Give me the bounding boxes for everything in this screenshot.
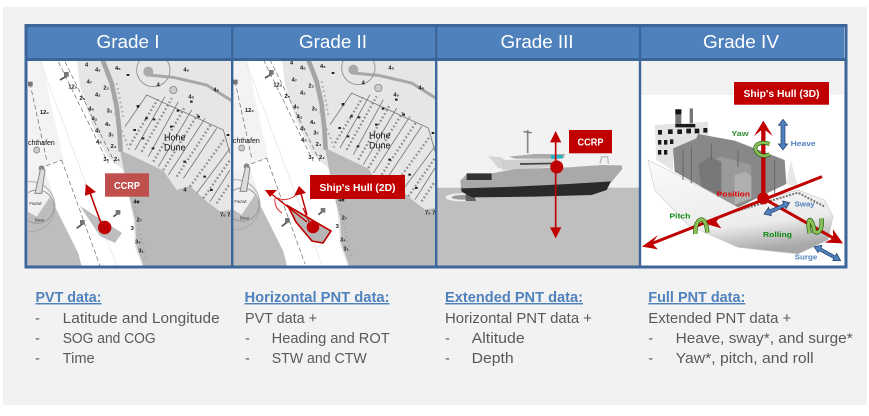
chart map: grade II: 4: [388, 186, 392, 192]
text block: Full PNT data: Yaw*, pitch, and roll: [676, 351, 814, 367]
chart map: grade I: 2₄: [111, 144, 117, 150]
chart map: grade I: 3₂: [107, 109, 113, 115]
chart map: grade II: 4₅: [393, 92, 399, 98]
chart map: grade I: chthafen: [28, 140, 55, 147]
icon: vessel side view: [446, 130, 622, 201]
chart map: grade II: 4₅: [388, 66, 394, 72]
blue translation arrows: [764, 119, 841, 261]
position dot: [307, 221, 319, 233]
green rotation arrows: [695, 143, 822, 234]
heading: Grade III: Grade III: [500, 32, 574, 52]
text block: Full PNT data: -: [648, 351, 653, 367]
motion labels: Rolling: [763, 230, 792, 239]
heading arrow: [85, 184, 101, 223]
chart map: grade II: [233, 61, 435, 266]
chart map: grade II: 2₅: [284, 94, 290, 100]
chart map: grade I: 4₅: [183, 68, 189, 74]
heading: Grade IV: [641, 27, 844, 58]
text block: PVT data: -: [35, 331, 40, 347]
chart map: grade II: 4: [290, 61, 294, 67]
chart map: grade I: 3₄: [135, 239, 141, 245]
text block: Extended PNT data: Extended PNT data:: [445, 290, 583, 306]
panel: grade II: [233, 27, 435, 266]
heading: Grade IV: Grade IV: [703, 32, 779, 52]
chart map: grade I: 4₁: [105, 122, 111, 128]
text block: Horizontal PNT data: Horizontal PNT data:: [244, 290, 390, 306]
chart map: grade I: 3: [131, 226, 134, 232]
position dot: [98, 221, 111, 234]
text block: Horizontal PNT data: STW and CTW: [272, 351, 367, 367]
chart map: grade II: 2₂: [308, 83, 314, 89]
motion labels: Yaw: [731, 129, 749, 138]
chart map: grade I: 4₂: [95, 93, 101, 99]
chart map: grade I: 12₀: [40, 110, 49, 116]
text block: Extended PNT data: Depth: [472, 351, 514, 367]
position dot: [757, 192, 769, 204]
heading: Grade I: [27, 27, 231, 58]
text block: Full PNT data: Full PNT data:: [648, 290, 745, 306]
heading: Grade II: Grade II: [299, 32, 367, 52]
chart map: grade II: Dune: [369, 141, 390, 151]
chart map: grade I: 3₇: [108, 133, 114, 139]
chart map: grade II: 4₅: [320, 64, 326, 70]
text block: PVT data: SOG and COG: [63, 331, 156, 347]
chart map: grade I: 2₇: [137, 218, 143, 224]
ship hull outline 2D: [288, 206, 331, 243]
chart map: grade II: 3₂: [312, 107, 318, 113]
label: Ship's Hull (3D): [734, 82, 829, 105]
label: Ship's Hull (2D): [310, 175, 405, 199]
chart map: grade II: 3₁: [343, 247, 349, 253]
heading: Grade I: Grade I: [96, 32, 160, 52]
text block: Extended PNT data: Horizontal PNT data +: [445, 311, 592, 327]
motion labels: Pitch: [669, 212, 691, 221]
label: Ship's Hull (3D): Ship's Hull (3D): [744, 89, 820, 100]
position dot: [550, 160, 563, 174]
chart map: grade II: 12₀: [245, 108, 254, 114]
chart map: grade I: 4₅: [88, 107, 94, 113]
chart map: grade II: 7₀ 7₁: [425, 211, 438, 217]
motion labels: Surge: [795, 253, 817, 262]
text block: Extended PNT data: -: [445, 331, 450, 347]
chart map: grade II: 3₅: [308, 155, 314, 161]
chart map: grade II: 4₅: [338, 197, 344, 203]
chart map: grade I: [28, 61, 231, 266]
motion labels: Heave: [791, 139, 816, 148]
chart map: grade II: 4₂: [300, 127, 306, 133]
table borders: [26, 26, 846, 267]
ship position outline: [80, 206, 122, 243]
motion labels: Sway: [795, 200, 815, 209]
chart map: grade I: 3₁: [138, 249, 144, 255]
chart map: grade II: 3₄: [340, 237, 346, 243]
chart map: grade II: 4₂: [297, 115, 303, 121]
chart map: grade II: 4₇: [292, 77, 298, 83]
chart map: grade II: 4₁: [310, 120, 316, 126]
chart map: grade II: Hohe: [369, 131, 390, 141]
heading: Grade III: [437, 27, 640, 58]
chart map: grade I: 4₂: [95, 129, 101, 135]
label: Ship's Hull (2D): Ship's Hull (2D): [320, 183, 396, 194]
text block: Horizontal PNT data: [244, 290, 390, 367]
chart map: grade I: 4₅: [188, 94, 194, 100]
text block: Horizontal PNT data: -: [245, 351, 250, 367]
chart map: grade II: 4₅: [301, 137, 307, 143]
text block: Horizontal PNT data: -: [245, 331, 250, 347]
chart map: grade II: 4₅: [300, 66, 306, 72]
chart map: grade I: 7₀ 7₁: [220, 213, 233, 219]
chart map: grade I: 4₅: [133, 199, 139, 205]
label: CCRP: [105, 173, 149, 197]
chart map: grade I: 12₀: [68, 84, 78, 90]
label: CCRP: CCRP: [578, 138, 604, 148]
heading arrow and course arrow: [265, 186, 310, 222]
text block: Full PNT data: Heave, sway*, and surge*: [676, 331, 853, 347]
chart map: grade I: Hohe: [164, 133, 185, 143]
chart map: grade II: 3₇: [313, 131, 319, 137]
chart map: grade I: 4₇: [87, 79, 93, 85]
chart map: grade I: 2₅: [79, 96, 85, 102]
grade table: [5, 26, 846, 273]
motion axes: [642, 121, 843, 249]
chart map: grade II: 2₇: [342, 216, 348, 222]
text block: Horizontal PNT data: Heading and ROT: [272, 331, 390, 347]
label: CCRP: CCRP: [114, 181, 140, 192]
chart map: grade I: 4₅: [95, 68, 101, 74]
chart map: grade II: 4: [362, 81, 366, 87]
panel: grade IV: [641, 27, 844, 267]
chart map: grade II: 4₅: [418, 86, 424, 92]
panel: grade III: [437, 27, 640, 267]
chart map: grade I: 2₂: [103, 85, 109, 91]
chart map: grade I: 4₂: [92, 117, 98, 123]
text block: PVT data: [35, 290, 220, 367]
text block: Extended PNT data: [445, 290, 592, 367]
text block: PVT data: Time: [63, 351, 95, 367]
chart map: grade I: 4₅: [96, 139, 102, 145]
vertical motion arrow: [550, 131, 561, 238]
text block: PVT data: PVT data:: [36, 290, 102, 306]
chart map: grade II: 2₄: [319, 155, 325, 161]
text block: PVT data: -: [35, 351, 40, 367]
chart map: grade II: 2₄: [316, 142, 322, 148]
label: CCRP: [569, 130, 612, 153]
chart map: grade II: Fwzwt: [234, 199, 247, 204]
chart map: grade I: 2₄: [114, 157, 120, 163]
chart map: grade I: Bear: [35, 218, 45, 223]
chart map: grade I: Dune: [164, 143, 185, 153]
text block: Full PNT data: -: [648, 331, 653, 347]
chart map: grade I: 3₅: [103, 157, 109, 163]
depth scene: [437, 130, 639, 266]
chart map: grade I: 4: [183, 188, 187, 194]
icon: container ship: [648, 108, 833, 254]
chart map: grade II: chthafen: [233, 138, 260, 145]
text block: PVT data: -: [35, 311, 40, 327]
chart map: grade II: Bear: [240, 216, 250, 221]
heading: Grade II: [233, 27, 436, 58]
motion labels: [669, 129, 817, 262]
text block: Horizontal PNT data: PVT data +: [245, 311, 317, 327]
text block: PVT data: Latitude and Longitude: [63, 311, 220, 327]
3D ship scene: [642, 82, 844, 266]
text block: Full PNT data: Extended PNT data +: [648, 311, 791, 327]
chart map: grade II: 4₅: [293, 105, 299, 111]
chart map: grade II: 3: [336, 224, 339, 230]
chart map: grade I: 4₅: [213, 88, 219, 94]
text block: Full PNT data: [648, 290, 853, 367]
motion labels: Position: [717, 190, 750, 199]
chart map: grade I: 4: [85, 63, 89, 69]
chart map: grade I: 4₅: [115, 66, 121, 72]
text block: Extended PNT data: -: [445, 351, 450, 367]
panel: grade I: [28, 27, 231, 266]
chart map: grade I: 4: [157, 83, 161, 89]
chart map: grade I: Fwzwt: [29, 201, 42, 206]
chart map: grade II: 12₀: [273, 82, 283, 88]
chart map: grade II: 4₂: [300, 91, 306, 97]
text block: Extended PNT data: Altitude: [472, 331, 525, 347]
